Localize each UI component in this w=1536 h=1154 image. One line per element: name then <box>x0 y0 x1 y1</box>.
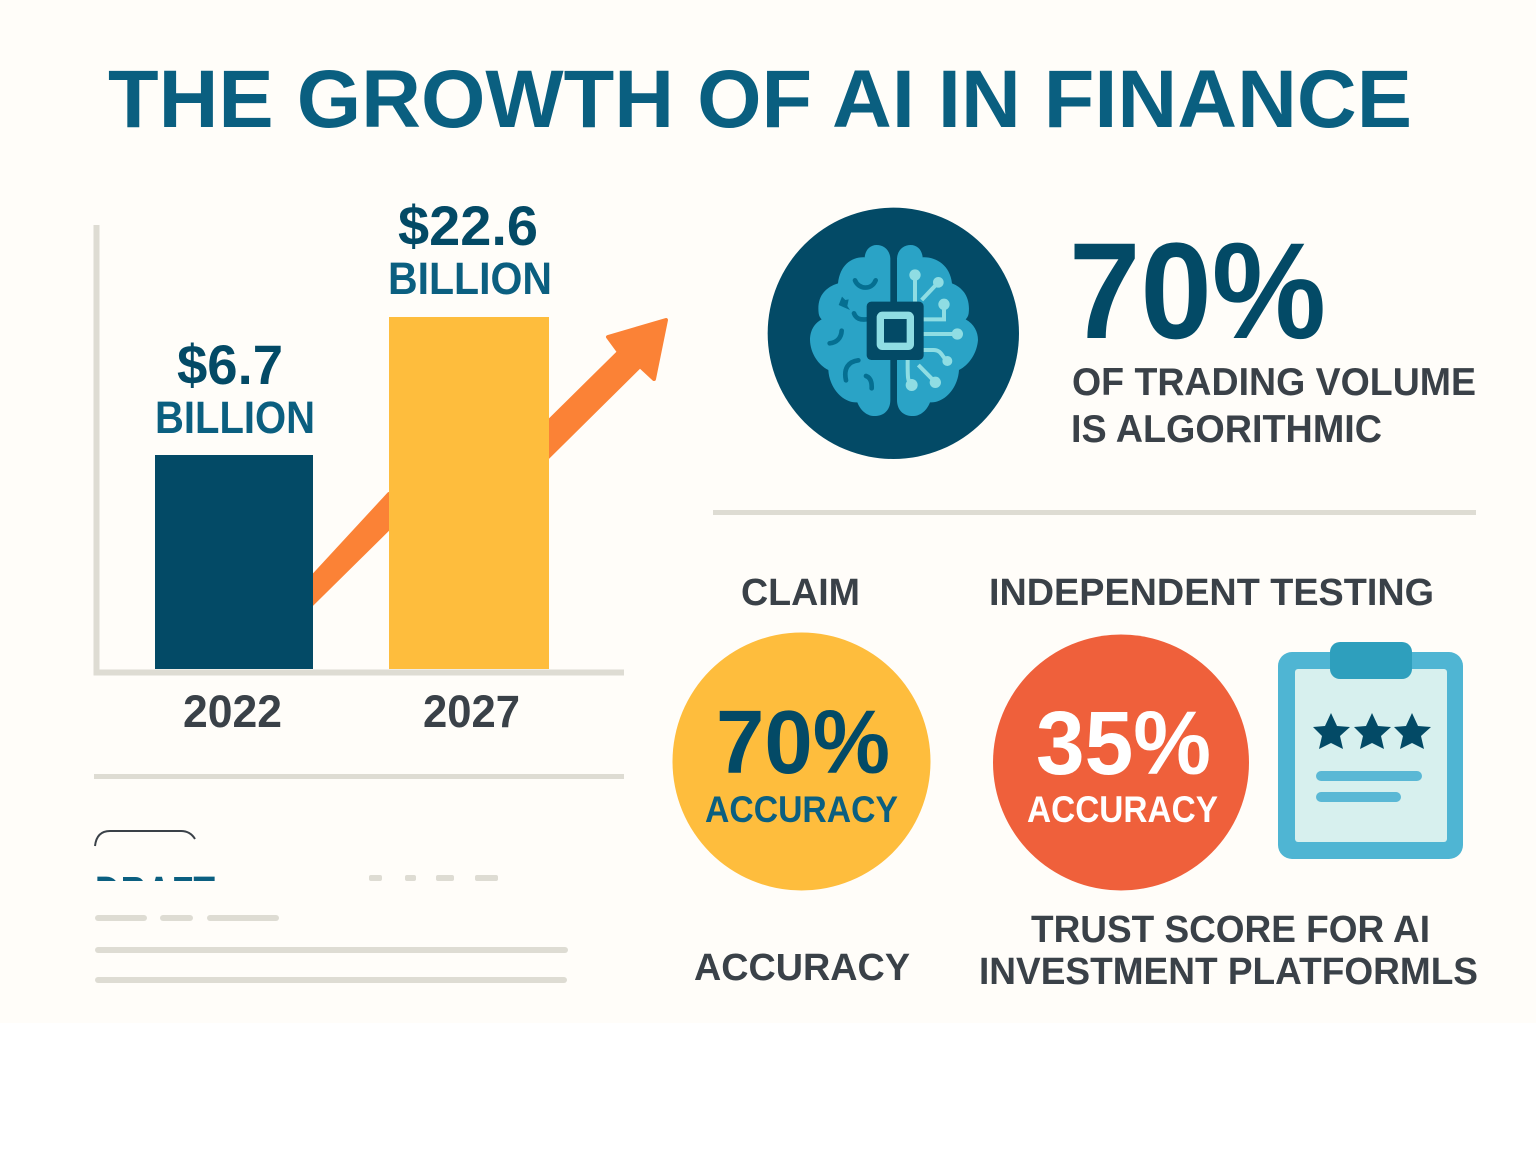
axis label: 2022: 2022 <box>183 686 282 737</box>
value label: 2027: $22.6 <box>398 194 538 257</box>
value label: 2027: BILLION <box>388 253 552 304</box>
caption: accuracy: ACCURACY <box>694 947 910 989</box>
bar: 2027 <box>389 317 549 669</box>
clipped heading fragment: DRAFT <box>95 868 215 921</box>
chart axes <box>96 225 624 672</box>
faded text block <box>95 831 568 983</box>
title: THE GROWTH OF AI IN FINANCE <box>108 54 1412 145</box>
panel: algorithmic trading <box>768 208 1476 459</box>
stat description: OF TRADING VOLUME <box>1072 361 1476 404</box>
badge: claimed accuracy <box>672 632 930 890</box>
stat description <box>1071 361 1476 451</box>
caption: trust score: TRUST SCORE FOR AI <box>1031 909 1430 951</box>
clipped heading fragment <box>94 830 215 881</box>
badge: tested accuracy: 35% <box>1036 694 1211 794</box>
placeholder lines <box>95 875 568 983</box>
badge: claimed accuracy: ACCURACY <box>705 789 898 830</box>
value label: 2022 <box>155 333 315 443</box>
panel: claim vs independent testing <box>672 572 1478 993</box>
bar chart: market growth <box>96 194 666 737</box>
stat: 70%: 70% <box>1069 215 1326 368</box>
axis label: 2027: 2027 <box>423 686 520 737</box>
growth arrow <box>305 320 666 611</box>
heading: independent testing: INDEPENDENT TESTING <box>989 572 1434 614</box>
badge: tested accuracy <box>993 634 1249 890</box>
value label: 2022: BILLION <box>155 392 315 443</box>
caption: trust score <box>979 909 1478 993</box>
stat description: IS ALGORITHMIC <box>1071 408 1382 451</box>
value label: 2027 <box>388 194 552 304</box>
icon: AI brain chip <box>768 208 1019 459</box>
badge: tested accuracy: ACCURACY <box>1027 789 1218 830</box>
icon: clipboard with three stars <box>1278 642 1463 859</box>
value label: 2022: $6.7 <box>177 333 283 396</box>
badge: claimed accuracy: 70% <box>716 693 890 793</box>
heading: claim: CLAIM <box>741 572 860 614</box>
caption: trust score: INVESTMENT PLATFORMLS <box>979 951 1478 993</box>
bar: 2022 <box>155 455 313 669</box>
